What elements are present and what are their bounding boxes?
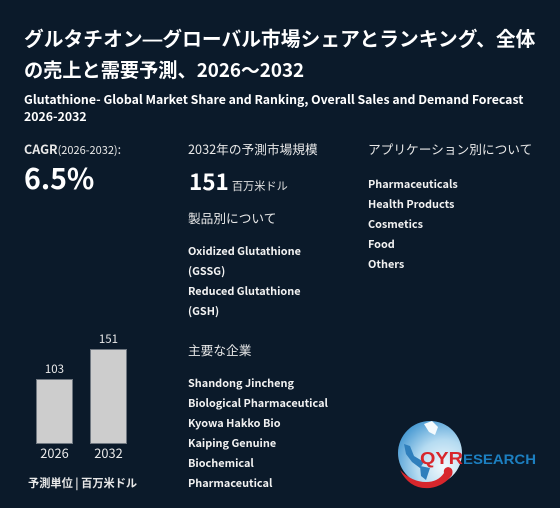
subtitle [24,90,524,125]
companies list: Pharmaceutical [188,475,272,491]
product heading: 製品別について [188,208,276,227]
unit caption: 予測単位 | 百万米ドル [28,475,137,491]
market size heading: 2032年の予測市場規模 [188,139,318,158]
companies list: Kaiping Genuine [188,435,276,451]
application list: Pharmaceuticals [368,176,458,192]
swoosh [400,467,452,488]
subtitle: Glutathione- Global Market Share and Ranking, Overall Sales and Demand Forecast [24,90,523,108]
market size value: 151 百万米ドル [189,165,288,197]
subtitle: 2026-2032 [24,107,87,125]
companies heading: 主要な企業 [188,340,251,359]
product list [188,243,301,319]
companies list: Kyowa Hakko Bio [188,415,281,431]
application list: Others [368,256,404,272]
CAGR label: CAGR(2026-2032): [24,139,121,158]
companies list: Biochemical [188,455,254,471]
product list: (GSSG) [188,263,225,279]
logo: QYResearch [398,421,536,488]
bar 2032 [90,331,126,462]
application heading: アプリケーション別について [368,139,532,158]
application list: Health Products [368,196,454,212]
bar chart [36,331,127,462]
globe [398,421,462,485]
product list: (GSH) [188,303,219,319]
logo text: QYR [420,448,463,468]
companies list: Biological Pharmaceutical [188,395,328,411]
logo: QYResearch: ESEARCH [463,451,536,467]
application list: Food [368,236,395,252]
bar 2026 [36,361,72,462]
companies list: Shandong Jincheng [188,375,294,391]
title: の売上と需要予測、2026～2032 [24,55,304,83]
bar 2026: 2026 [40,443,69,462]
title: グルタチオン—グローバル市場シェアとランキング、全体 [24,23,535,52]
application list: Cosmetics [368,216,423,232]
bar 2026: 103 [45,361,64,377]
product list: Oxidized Glutathione [188,243,301,259]
CAGR value: 6.5% [24,157,94,198]
product list: Reduced Glutathione [188,283,301,299]
companies list [188,375,328,491]
title [24,23,535,83]
application list [368,176,458,272]
bar 2032: 2032 [94,443,123,462]
bar 2032: 151 [99,331,118,347]
